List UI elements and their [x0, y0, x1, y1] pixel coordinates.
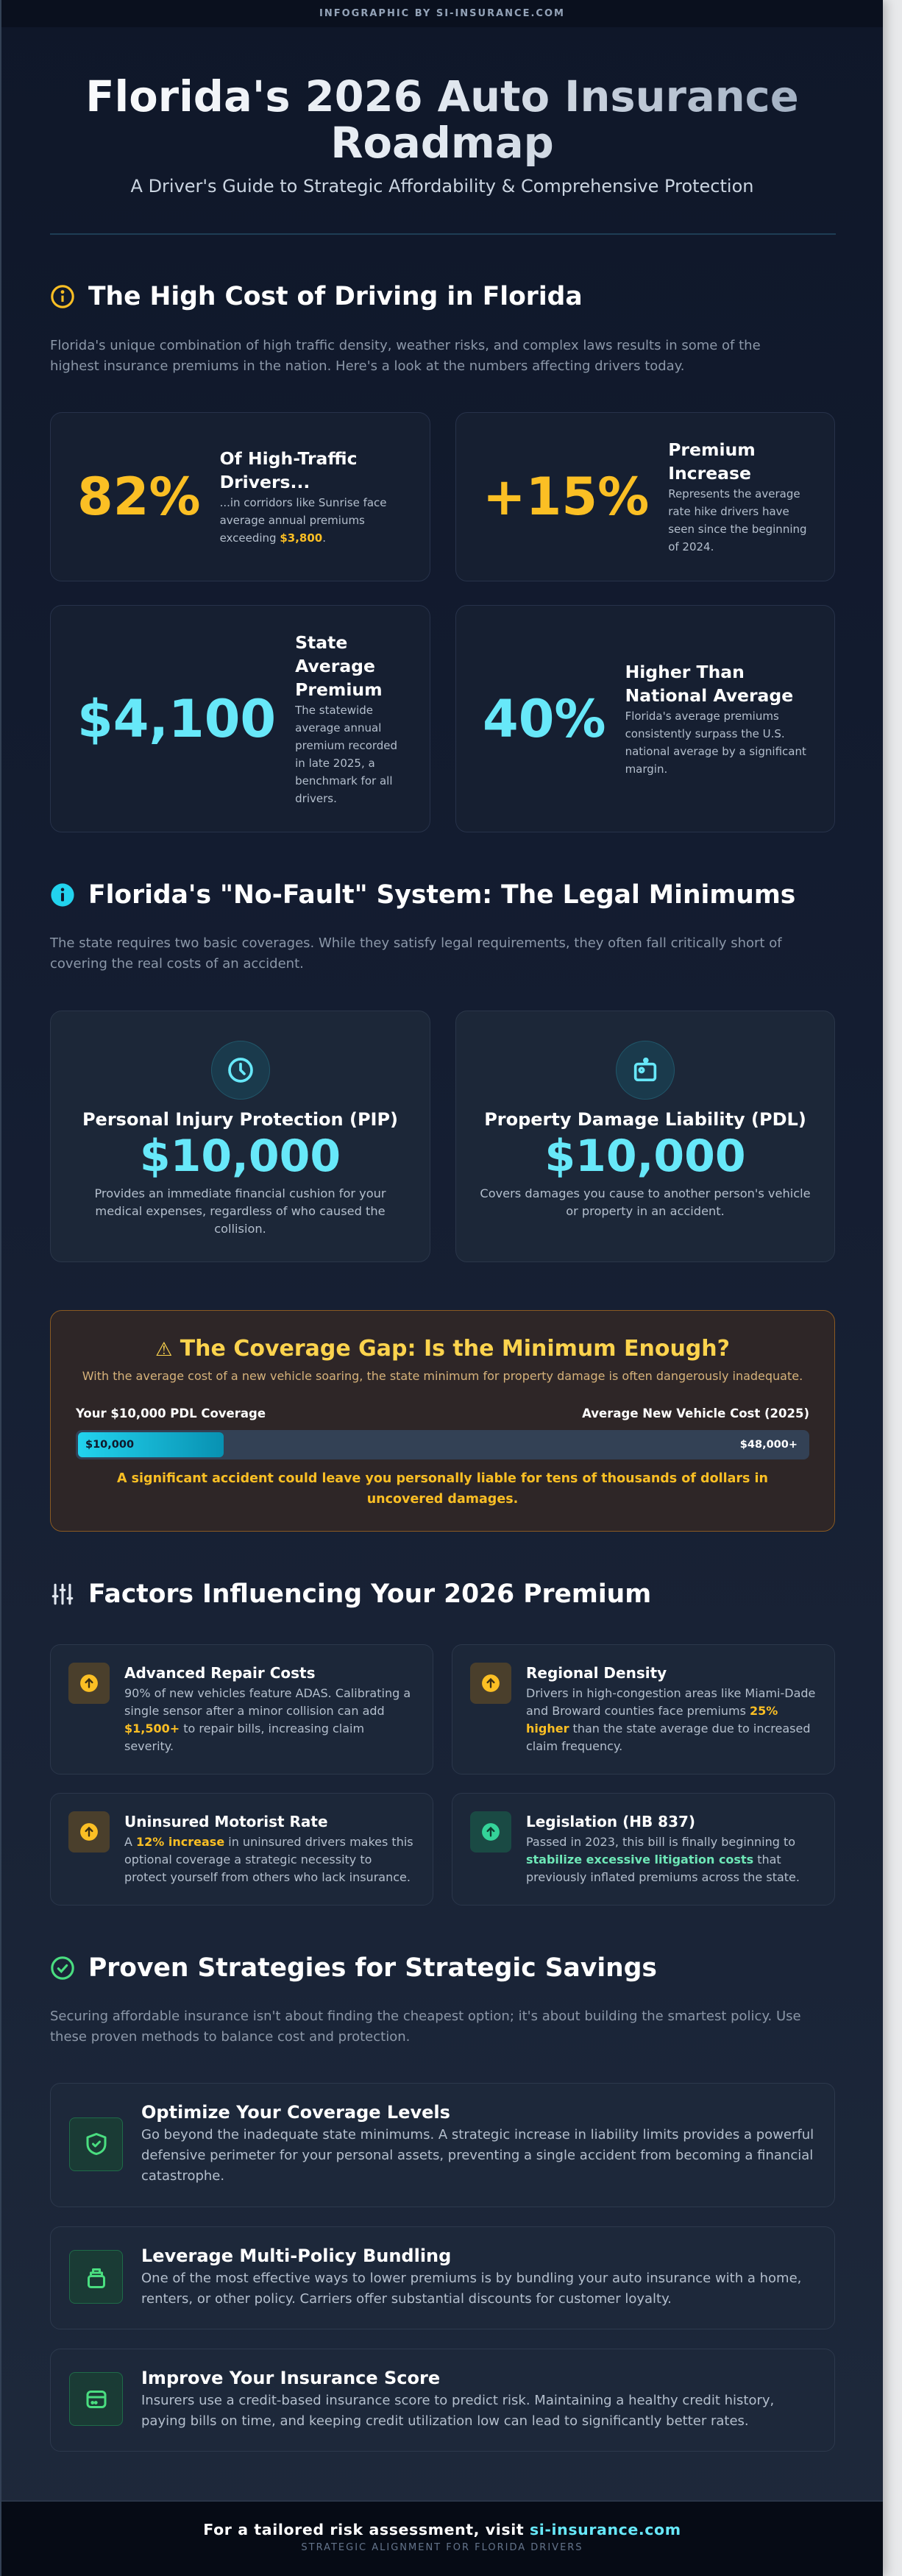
gap subtitle: With the average cost of a new vehicle soaring, the state minimum for property damage is often dangerously inadequate. [82, 1369, 803, 1383]
intro text: no-fault: The state requires two basic coverages. While they satisfy legal requirements, they often fall critically short of covering the real costs of an accident. [50, 935, 782, 972]
factor card: uninsured: A 12% increase in uninsured drivers makes this optional coverage a strategic necessity to protect yourself from others who lack insurance. [124, 1835, 413, 1884]
bar chart: coverage vs cost: $10,000 [85, 1439, 134, 1451]
icon: info filled [51, 883, 74, 907]
stat card: +15%: Represents the average rate hike drivers have seen since the beginning of 2024. [668, 487, 807, 553]
bar labels [75, 1406, 809, 1420]
bar chart: coverage vs cost [76, 1430, 809, 1459]
footer: STRATEGIC ALIGNMENT FOR FLORIDA DRIVERS [301, 2542, 583, 2553]
stat card: 82%: 82% [77, 467, 201, 527]
strategy card: insurance score: Insurers use a credit-based insurance score to predict risk. Maintaining a healthy credit history, paying bills on time, and keeping credit utilization low can lead to significantly better rates. [141, 2392, 774, 2429]
intro text: high cost: Florida's unique combination of high traffic density, weather risks, and complex laws results in some of the highest insurance premiums in the nation. Here's a look at the numbers affecting drivers today. [50, 338, 761, 374]
factor card: regional density: Drivers in high-congestion areas like Miami-Dade and Broward counties face premiums 25% higher than the state average due to increased claim frequency. [526, 1686, 815, 1753]
strategy card: insurance score: Improve Your Insurance Score [141, 2367, 440, 2388]
factor card: legislation: Legislation (HB 837) [526, 1813, 695, 1830]
bar chart: coverage vs cost: $48,000+ [740, 1439, 798, 1451]
heading: strategies: Proven Strategies for Strategic Savings [88, 1953, 657, 1983]
coverage card: PIP: $10,000 [140, 1130, 341, 1182]
footer [1, 2500, 883, 2576]
strategy card: coverage levels: Go beyond the inadequate state minimums. A strategic increase in liability limits provides a powerful defensive perimeter for your personal assets, preventing a single accident from becoming a financial catastrophe. [141, 2127, 814, 2184]
icon: check circle [51, 1956, 74, 1980]
stat card: +15%: Premium Increase [668, 439, 756, 484]
strategy card: coverage levels [50, 2083, 835, 2207]
strategy card: bundling: Leverage Multi-Policy Bundling [141, 2245, 451, 2265]
coverage card: PIP [50, 1011, 430, 1262]
strategy card: bundling: One of the most effective ways to lower premiums is by bundling your auto insurance with a home, renters, or other policy. Carriers offer substantial discounts for customer loyalty. [141, 2270, 801, 2307]
icon: up arrow green [470, 1811, 511, 1853]
subtitle: A Driver's Guide to Strategic Affordability & Comprehensive Protection [131, 176, 753, 197]
coverage card: PDL [455, 1011, 835, 1262]
title: Roadmap [330, 118, 554, 168]
icon: info outline [51, 285, 74, 308]
icon: up arrow yellow [68, 1663, 110, 1704]
factor card: repair costs: Advanced Repair Costs [124, 1664, 316, 1682]
top bar: INFOGRAPHIC BY SI-INSURANCE.COM [319, 8, 565, 19]
heading: no-fault: Florida's "No-Fault" System: The Legal Minimums [88, 880, 795, 910]
coverage card: PIP: Personal Injury Protection (PIP) [82, 1109, 398, 1130]
bar labels: Average New Vehicle Cost (2025) [582, 1406, 809, 1420]
factor card: legislation: Passed in 2023, this bill is finally beginning to stabilize excessive litigation costs that previously inflated premiums across the state. [526, 1835, 800, 1884]
factor card: uninsured [50, 1793, 433, 1906]
icon: id badge [616, 1041, 675, 1100]
icon: up arrow yellow [470, 1663, 511, 1704]
stat card: 82%: Of High-Traffic Drivers... [220, 448, 358, 492]
stat card: $4,100: $4,100 [77, 689, 276, 749]
stat card: $4,100 [50, 605, 430, 832]
stat card: $4,100: State Average Premium [295, 631, 383, 699]
stat card: 82% [50, 412, 430, 581]
stat card: +15%: +15% [483, 467, 649, 527]
stat card: 40%: Florida's average premiums consistently surpass the U.S. national average by a significant margin. [625, 710, 806, 776]
icon: card [69, 2372, 123, 2426]
gap title: ⚠ The Coverage Gap: Is the Minimum Enough? [155, 1336, 730, 1362]
stat card: 40%: 40% [483, 689, 606, 749]
warning text: A significant accident could leave you personally liable for tens of thousands of dollars in uncovered damages. [117, 1471, 768, 1507]
factor card: regional density [452, 1644, 835, 1774]
icon: clock [210, 1041, 269, 1100]
top bar [1, 0, 883, 27]
icon: sliders [52, 1584, 74, 1604]
stat card: $4,100: The statewide average annual premium recorded in late 2025, a benchmark for all drivers. [295, 704, 397, 805]
coverage card: PIP: Provides an immediate financial cushion for your medical expenses, regardless of who caused the collision. [94, 1186, 386, 1236]
factor card: uninsured: Uninsured Motorist Rate [124, 1813, 328, 1830]
icon: stack [69, 2250, 123, 2304]
strategy card: coverage levels: Optimize Your Coverage Levels [141, 2102, 450, 2123]
strategy card: insurance score [50, 2349, 835, 2452]
coverage card: PDL: Covers damages you cause to another person's vehicle or property in an accident. [480, 1186, 811, 1218]
icon: up arrow yellow [68, 1811, 110, 1853]
bar labels: Your $10,000 PDL Coverage [76, 1406, 266, 1420]
coverage card: PDL: $10,000 [544, 1130, 746, 1182]
stat card: +15% [455, 412, 835, 581]
factor card: repair costs: 90% of new vehicles feature ADAS. Calibrating a single sensor after a minor collision can add $1,500+ to repair bills, increasing claim severity. [124, 1686, 411, 1753]
factor card: regional density: Regional Density [526, 1664, 667, 1682]
factor card: repair costs [50, 1644, 433, 1774]
stat card: 40%: Higher Than National Average [625, 661, 793, 705]
footer: For a tailored risk assessment, visit si-insurance.com [203, 2521, 681, 2538]
intro text: strategies: Securing affordable insurance isn't about finding the cheapest option; it's about building the smartest policy. Use these proven methods to balance cost and protection. [50, 2009, 801, 2045]
stat card: 40% [455, 605, 835, 832]
stat card: 82%: ...in corridors like Sunrise face average annual premiums exceeding $3,800. [220, 496, 387, 545]
heading: factors: Factors Influencing Your 2026 Premium [88, 1579, 651, 1609]
coverage card: PDL: Property Damage Liability (PDL) [484, 1109, 806, 1130]
heading: high cost: The High Cost of Driving in Florida [88, 282, 583, 311]
strategy card: bundling [50, 2226, 835, 2329]
icon: shield [69, 2117, 123, 2171]
factor card: legislation [452, 1793, 835, 1906]
title: Florida's 2026 Auto Insurance [85, 72, 799, 121]
title [1, 74, 883, 166]
callout: coverage gap [50, 1310, 835, 1532]
